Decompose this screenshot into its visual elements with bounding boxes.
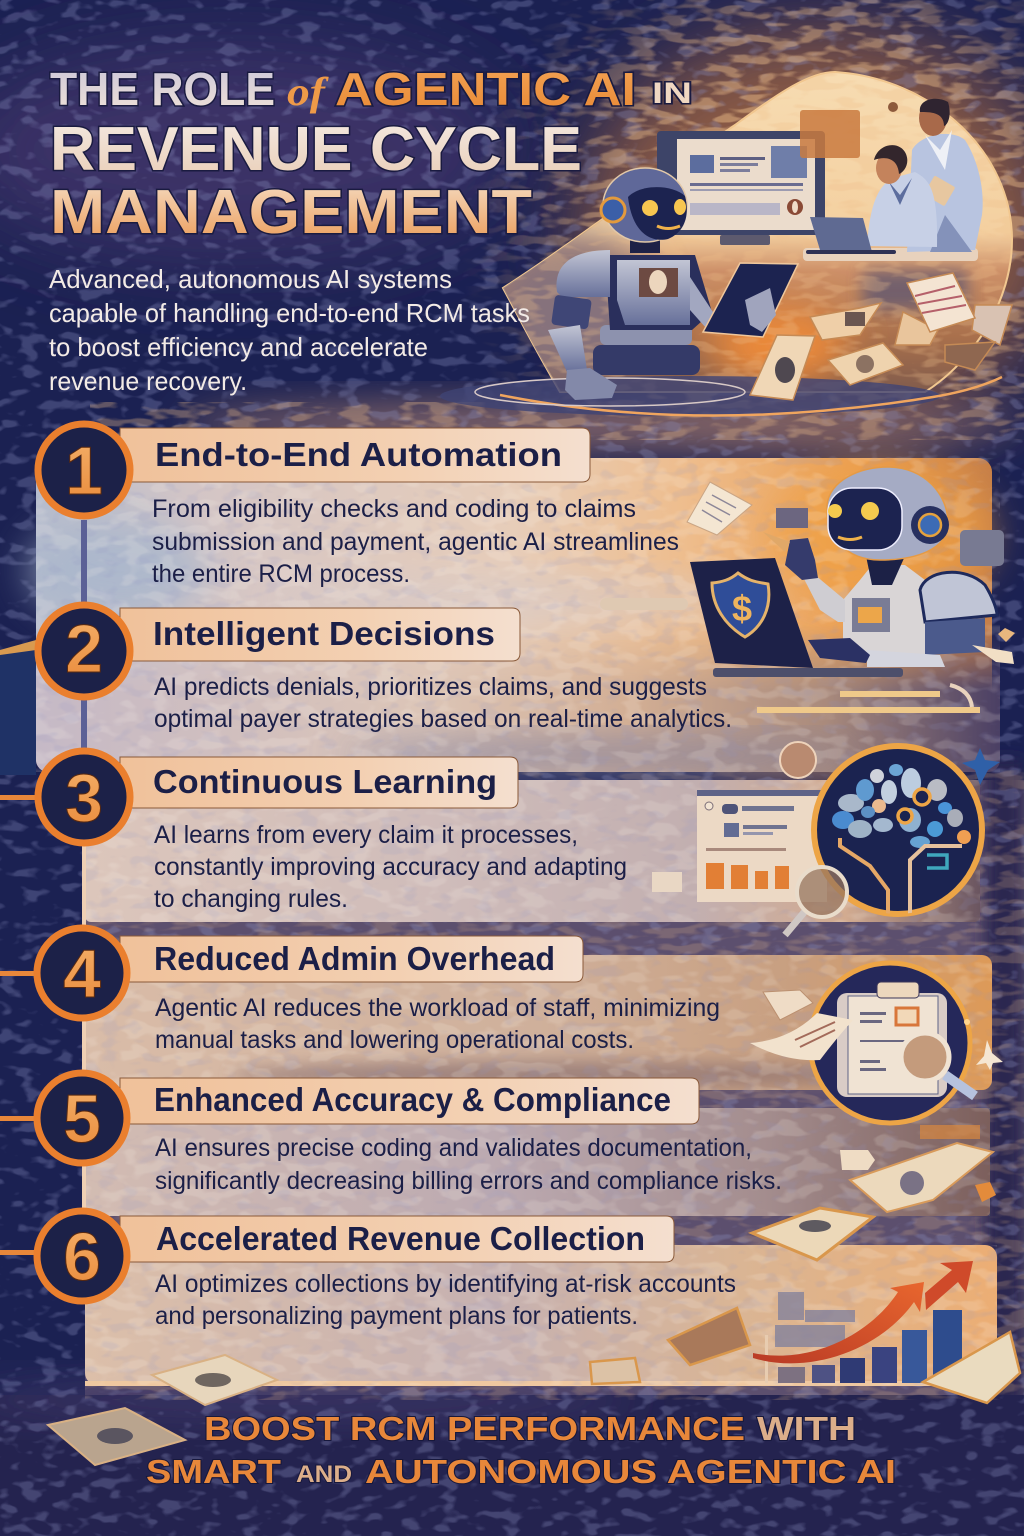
title: AGENTIC AI xyxy=(335,63,636,115)
item 4: reduced admin overhead xyxy=(37,928,720,1054)
star xyxy=(962,748,1000,785)
intro text: to boost efficiency and accelerate xyxy=(49,332,428,362)
panel: end-to-end automation and intelligent decisions backdrop xyxy=(30,458,1000,772)
magnifier xyxy=(785,867,847,935)
panel: accelerated revenue backdrop xyxy=(85,1245,997,1386)
body xyxy=(155,1270,736,1330)
body xyxy=(154,821,627,913)
illustration: robot with clinicians and cash in a glowing bubble xyxy=(440,72,1020,416)
title: IN xyxy=(652,77,692,110)
floating papers xyxy=(972,645,1014,664)
item 1: end-to-end automation xyxy=(38,424,679,588)
footer call to action: AUTONOMOUS AGENTIC AI xyxy=(365,1453,896,1490)
heading tab xyxy=(120,608,520,661)
illustration: dashboard, brain circuit and magnifier xyxy=(652,742,1000,935)
brain circle xyxy=(814,746,982,925)
small sensor xyxy=(888,102,898,112)
title: of xyxy=(287,69,329,114)
body: From eligibility checks and coding to claims xyxy=(152,495,636,523)
number badge: 5 xyxy=(63,1081,101,1157)
laptop with shield: $ xyxy=(732,588,752,629)
heading tab xyxy=(120,757,518,808)
illustration: robot at laptop with shield xyxy=(600,467,1015,713)
bubble backdrop xyxy=(503,72,1012,392)
number badge xyxy=(37,1211,127,1301)
cash and papers xyxy=(750,273,1012,400)
number badge: 6 xyxy=(63,1219,101,1295)
body: submission and payment, agentic AI streamlines xyxy=(152,528,679,556)
illustration: floating bills xyxy=(752,1125,996,1260)
bills xyxy=(590,1308,1020,1403)
footer bills xyxy=(48,1355,277,1465)
title xyxy=(50,63,692,247)
body xyxy=(154,673,732,733)
body: to changing rules. xyxy=(154,885,348,913)
body: optimal payer strategies based on real-time analytics. xyxy=(154,705,732,733)
footer call to action xyxy=(146,1410,896,1490)
clipboard xyxy=(837,982,947,1097)
heading: End-to-End Automation xyxy=(155,436,562,473)
robot head xyxy=(827,467,949,560)
back doctor xyxy=(907,99,983,252)
number badge: 2 xyxy=(65,611,103,687)
back document xyxy=(763,990,813,1020)
body: AI learns from every claim it processes, xyxy=(154,821,578,849)
intro text: revenue recovery. xyxy=(49,366,247,396)
heading: Accelerated Revenue Collection xyxy=(156,1220,645,1257)
heading: Reduced Admin Overhead xyxy=(154,940,555,977)
item 2: intelligent decisions xyxy=(38,605,732,733)
heading tab xyxy=(120,1078,699,1124)
bubble shading xyxy=(485,235,1020,397)
tablet xyxy=(703,263,798,337)
robot xyxy=(548,168,713,400)
laptop with shield xyxy=(690,558,903,677)
body: Agentic AI reduces the workload of staff, minimizing xyxy=(155,994,720,1022)
body: the entire RCM process. xyxy=(152,560,410,588)
intro text xyxy=(49,264,530,396)
body: AI ensures precise coding and validates documentation, xyxy=(155,1134,752,1162)
laptop xyxy=(810,217,872,252)
body: significantly decreasing billing errors and compliance risks. xyxy=(155,1167,782,1195)
monitor xyxy=(657,131,825,245)
panel texture xyxy=(36,458,1000,1385)
axis xyxy=(765,1335,768,1383)
number badge: 4 xyxy=(63,936,101,1012)
number badge: 3 xyxy=(65,760,103,836)
panel: enhanced accuracy backdrop xyxy=(85,1108,990,1216)
number badge xyxy=(38,424,130,516)
body: and personalizing payment plans for patients. xyxy=(155,1302,638,1330)
heading tab xyxy=(120,1216,674,1262)
number badge: 1 xyxy=(65,433,103,509)
body xyxy=(155,994,720,1054)
panel: continuous learning backdrop xyxy=(85,780,980,922)
front doctor xyxy=(867,145,937,247)
timeline connector xyxy=(0,520,87,1255)
bar chart and rising arrow xyxy=(590,1261,1020,1403)
body xyxy=(155,1134,782,1195)
number badge xyxy=(37,928,127,1018)
heading: Continuous Learning xyxy=(153,763,497,800)
panel: reduced admin overhead backdrop xyxy=(85,955,992,1090)
arrow xyxy=(753,1261,973,1363)
curled paper xyxy=(750,1013,853,1060)
body: AI optimizes collections by identifying at-risk accounts xyxy=(155,1270,736,1298)
floating document xyxy=(687,482,752,535)
robot body xyxy=(763,532,997,667)
body: constantly improving accuracy and adapting xyxy=(154,853,627,881)
title: THE ROLE xyxy=(50,63,275,115)
number badge xyxy=(37,1073,127,1163)
item 3: continuous learning xyxy=(38,751,627,913)
number badge xyxy=(38,605,130,697)
mini card xyxy=(776,508,808,528)
body: AI predicts denials, prioritizes claims, and suggests xyxy=(154,673,707,701)
intro text: capable of handling end-to-end RCM tasks xyxy=(49,298,530,328)
footer call to action: AND xyxy=(296,1461,352,1488)
floor xyxy=(440,376,1002,416)
body: manual tasks and lowering operational costs. xyxy=(155,1026,634,1054)
small app card xyxy=(800,110,860,158)
title: REVENUE CYCLE xyxy=(50,115,582,184)
body xyxy=(152,495,679,588)
intro text: Advanced, autonomous AI systems xyxy=(49,264,452,294)
clipboard circle xyxy=(810,963,970,1123)
magnifier xyxy=(901,1033,975,1096)
footer call to action: SMART xyxy=(146,1453,281,1490)
heading tab xyxy=(120,428,590,482)
footer call to action: BOOST RCM PERFORMANCE xyxy=(204,1410,745,1447)
sparkle xyxy=(964,1019,1003,1070)
footer call to action: WITH xyxy=(757,1410,856,1447)
heading tab xyxy=(120,936,583,982)
heading: Enhanced Accuracy & Compliance xyxy=(154,1081,671,1118)
item 5: enhanced accuracy and compliance xyxy=(37,1073,782,1195)
title: MANAGEMENT xyxy=(50,178,532,247)
desk xyxy=(803,248,978,261)
illustration: clipboard and magnifier xyxy=(750,963,1003,1123)
console rails xyxy=(600,598,980,713)
faded building xyxy=(775,1292,855,1347)
heading: Intelligent Decisions xyxy=(153,615,495,652)
dashboard xyxy=(652,790,827,902)
bars xyxy=(778,1310,962,1383)
item 6: accelerated revenue collection xyxy=(37,1211,736,1330)
number badge xyxy=(38,751,130,843)
glass orb xyxy=(780,742,816,778)
